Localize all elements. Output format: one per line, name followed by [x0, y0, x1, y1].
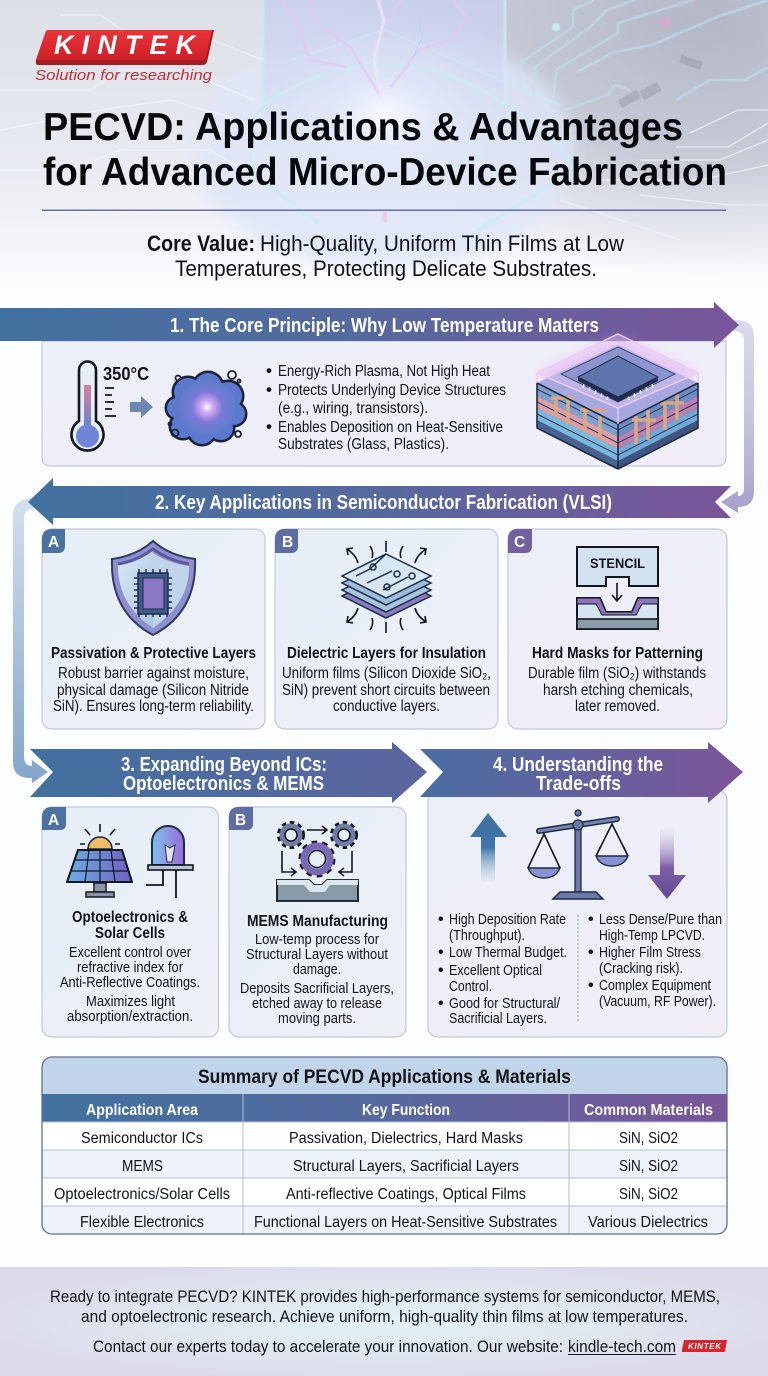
footer logo [682, 1340, 727, 1352]
title divider [42, 210, 726, 211]
text block: limitations: Less Dense/Pure than [599, 912, 722, 928]
text block: advantages: • [438, 944, 444, 961]
icon: plasma cloud [167, 371, 245, 444]
text block: limitations: High-Temp LPCVD. [599, 928, 705, 944]
heading: Dielectric Layers for Insulation [287, 645, 486, 662]
badge B: B [235, 812, 246, 829]
text block: limitations: (Vacuum, RF Power). [599, 994, 716, 1010]
text block: core principle bullets: Energy-Rich Plasma, Not High Heat [278, 363, 491, 380]
text block: core principle bullets: Protects Underlying Device Structures [278, 382, 506, 399]
card C: hard masks [508, 529, 727, 729]
footer call to action: and optoelectronic research. Achieve uniform, high-quality thin films at low temperatures. [81, 1308, 688, 1326]
text block: limitations [588, 911, 722, 1010]
icon: LED [146, 826, 193, 898]
body text [528, 665, 706, 715]
badge B [275, 529, 298, 553]
body text [60, 945, 200, 1025]
icon: stencil and etched layers [577, 547, 658, 629]
footer call to action: kindle-tech.com [568, 1338, 676, 1356]
table row: Semiconductor ICs: SiN, SiO2 [619, 1130, 678, 1147]
logo: KINTEK [35, 30, 214, 84]
title [43, 106, 727, 194]
icon: shield with chip [112, 541, 195, 635]
table title [42, 1057, 727, 1094]
text block: advantages: Control. [449, 979, 492, 995]
text block: limitations: • [588, 944, 594, 961]
icon: layered films with arrows [342, 541, 431, 633]
heading: Optoelectronics & [72, 909, 188, 926]
icon: arrow to plasma [130, 396, 153, 418]
text block: advantages: Sacrificial Layers. [449, 1011, 547, 1027]
panel: trade-offs [428, 790, 727, 1037]
banner arrow: section 3 [30, 742, 427, 803]
text block: limitations: Higher Film Stress [599, 945, 701, 961]
banner arrow: section 3: Optoelectronics & MEMS [123, 773, 324, 795]
banner arrow: section 3: 3. Expanding Beyond ICs: [121, 754, 327, 776]
core value statement: Core Value: [147, 231, 255, 256]
icon: stencil and etched layers: STENCIL [590, 555, 645, 571]
text block: advantages [438, 911, 567, 1027]
table title: Summary of PECVD Applications & Materials [198, 1066, 571, 1088]
body text: moving parts. [278, 1011, 356, 1027]
card A: passivation [42, 529, 265, 729]
table row: Semiconductor ICs: Semiconductor ICs [81, 1130, 203, 1147]
table row: Flexible Electronics: Various Dielectrics [588, 1214, 708, 1231]
text block: limitations: (Cracking risk). [599, 961, 683, 977]
footer call to action [0, 1267, 768, 1376]
badge C: C [514, 534, 525, 551]
heading: Passivation & Protective Layers [51, 645, 256, 662]
title: PECVD: Applications & Advantages [43, 106, 683, 149]
text block: core principle bullets: • [266, 361, 272, 380]
icon: up arrow [470, 813, 507, 882]
table row: MEMS: SiN, SiO2 [619, 1158, 678, 1175]
body text: SiN) prevent short circuits between [282, 682, 490, 699]
body text: Excellent control over [69, 945, 191, 961]
text block: core principle bullets [266, 361, 506, 453]
table row: MEMS: MEMS [122, 1158, 163, 1175]
table row: Semiconductor ICs [42, 1122, 727, 1150]
title: for Advanced Micro-Device Fabrication [43, 151, 727, 194]
table header row: Common Materials [584, 1102, 713, 1119]
text block: core principle bullets: Enables Deposition on Heat-Sensitive [278, 419, 503, 436]
table row: Semiconductor ICs: Passivation, Dielectrics, Hard Masks [289, 1130, 523, 1147]
text block: advantages: • [438, 911, 444, 928]
summary table [42, 1057, 727, 1234]
footer call to action: Ready to integrate PECVD? KINTEK provides high-performance systems for semiconductor, MEMS, [50, 1288, 720, 1306]
body text: Deposits Sacrificial Layers, [240, 981, 394, 997]
text block: core principle bullets: Substrates (Glass, Plastics). [278, 436, 449, 453]
text block: advantages: Excellent Optical [449, 963, 542, 979]
table header row [42, 1094, 727, 1122]
card: optoelectronics and solar cells [42, 807, 218, 1037]
badge B [229, 807, 253, 830]
heading: Hard Masks for Patterning [532, 645, 703, 662]
text block: advantages: High Deposition Rate [449, 912, 566, 928]
body text: refractive index for [77, 960, 183, 976]
body text: Robust barrier against moisture, [58, 665, 249, 682]
core value statement: Temperatures, Protecting Delicate Substrates. [175, 256, 597, 281]
text block: limitations: Complex Equipment [599, 978, 711, 994]
icon: balance scale [528, 810, 628, 899]
icon: solar panel with sun [67, 824, 132, 897]
heading [72, 909, 188, 942]
icon: thermometer [72, 362, 116, 451]
heading: Solar Cells [95, 925, 165, 942]
table row: Flexible Electronics [42, 1206, 727, 1234]
body text: Anti-Reflective Coatings. [60, 975, 200, 991]
label: 350°C: 350°C [103, 364, 149, 384]
table row: Flexible Electronics: Functional Layers on Heat-Sensitive Substrates [254, 1214, 557, 1231]
body text [282, 665, 491, 715]
body text: damage. [293, 962, 341, 978]
panel: core principle [42, 341, 726, 466]
body text: conductive layers. [333, 698, 440, 715]
text block: advantages: Good for Structural/ [449, 996, 561, 1012]
text block: core principle bullets: (e.g., wiring, transistors). [278, 400, 428, 417]
badge A [42, 529, 65, 553]
body text: Maximizes light [86, 994, 175, 1010]
table header row: Application Area [86, 1102, 198, 1119]
text block: advantages: Low Thermal Budget. [449, 945, 567, 961]
body text: Uniform films (Silicon Dioxide SiO₂, [282, 665, 491, 682]
text block: advantages: (Throughput). [449, 928, 525, 944]
badge C [508, 529, 532, 553]
banner arrow: section 2 [28, 478, 731, 525]
body text: Durable film (SiO₂) withstands [528, 665, 706, 682]
banner arrow: section 4 [420, 742, 743, 803]
badge A: A [48, 534, 59, 551]
body text: etched away to release [252, 996, 382, 1012]
table row: MEMS: Structural Layers, Sacrificial Layers [293, 1158, 519, 1175]
table row: MEMS [42, 1150, 727, 1178]
table row: Optoelectronics/Solar Cells: Optoelectronics/Solar Cells [54, 1186, 230, 1203]
body text: SiN). Ensures long-term reliability. [53, 698, 254, 715]
heading: MEMS Manufacturing [247, 913, 388, 930]
footer logo: KINTEK [688, 1342, 722, 1351]
body text [53, 665, 254, 715]
logo: KINTEK: Solution for researching [35, 68, 212, 84]
icon: gears and substrate [277, 824, 358, 901]
logo: KINTEK: KINTEK [54, 30, 198, 60]
body text: later removed. [575, 698, 660, 715]
connector arrow: section 2 to section 3 [13, 498, 48, 783]
badge A: A [48, 812, 59, 829]
text block: advantages: • [438, 995, 444, 1012]
body text [240, 932, 394, 1027]
core value statement: High-Quality, Uniform Thin Films at Low [260, 231, 624, 256]
footer call to action: Contact our experts today to accelerate your innovation. Our website: [93, 1338, 563, 1356]
text block: core principle bullets: • [266, 380, 272, 399]
text block: limitations: • [588, 977, 594, 994]
body text: harsh etching chemicals, [543, 682, 693, 699]
body text: Low-temp process for [255, 932, 379, 948]
card: MEMS manufacturing [229, 807, 406, 1037]
table header row: Key Function [362, 1102, 450, 1119]
table row: Flexible Electronics: Flexible Electronics [80, 1214, 204, 1231]
banner arrow: section 1: 1. The Core Principle: Why Low Temperature Matters [170, 315, 599, 337]
table row: Optoelectronics/Solar Cells [42, 1178, 727, 1206]
badge A [42, 807, 66, 830]
table row: Optoelectronics/Solar Cells: Anti-reflective Coatings, Optical Films [286, 1186, 526, 1203]
card B: dielectric [275, 529, 498, 729]
core value statement [147, 231, 624, 281]
connector arrow: section 1 to section 2 [721, 320, 754, 513]
table row: Optoelectronics/Solar Cells: SiN, SiO2 [619, 1186, 678, 1203]
body text: Structural Layers without [246, 947, 388, 963]
body text: physical damage (Silicon Nitride [57, 682, 249, 699]
text block: advantages: • [438, 962, 444, 979]
badge B: B [282, 534, 293, 551]
banner arrow: section 4: 4. Understanding the [493, 754, 663, 776]
icon: down arrow [648, 829, 686, 899]
body text: absorption/extraction. [67, 1009, 193, 1025]
text block: core principle bullets: • [266, 417, 272, 436]
text block: limitations: • [588, 911, 594, 928]
icon: chip on layered wafer [537, 334, 698, 469]
banner arrow: section 4: Trade-offs [536, 773, 621, 795]
banner arrow: section 1 [0, 302, 739, 348]
banner arrow: section 2: 2. Key Applications in Semiconductor Fabrication (VLSI) [155, 491, 612, 514]
